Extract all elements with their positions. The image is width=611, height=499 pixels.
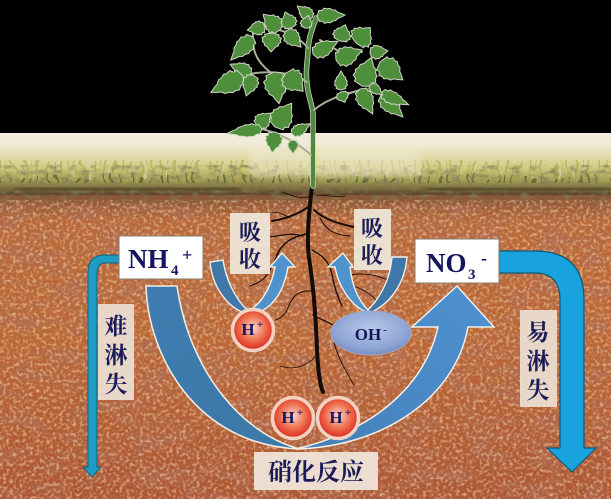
- arrow: nitrification curve to NO3-: [296, 286, 494, 449]
- OH- ion: -: [383, 324, 387, 336]
- H+ ion, centre left: +: [297, 407, 303, 419]
- label: absorb, left: [230, 213, 270, 274]
- H+ ion, centre right: H: [329, 408, 343, 427]
- label: hard to leach: 难: [104, 314, 128, 339]
- label: easy to leach: 淋: [526, 349, 550, 374]
- soil and grass background: [0, 133, 611, 499]
- arrow: H+ uptake, left: [210, 253, 295, 313]
- label: hard to leach: [98, 304, 134, 400]
- NO3- label box: NO: [426, 248, 466, 278]
- label: absorb, right: 吸: [361, 216, 383, 241]
- H+ ion, centre left: H: [281, 408, 295, 427]
- H+ ion, left: H: [241, 320, 255, 339]
- H+ ion, left: +: [257, 319, 263, 331]
- label: absorb, right: 收: [361, 243, 383, 268]
- OH- ion: [331, 311, 411, 355]
- label: easy to leach: 易: [526, 320, 550, 345]
- plant roots: [250, 186, 392, 392]
- NO3- label box: 3: [468, 267, 476, 283]
- NH4+ label box: NH: [128, 244, 168, 274]
- label: absorb, right: [354, 209, 391, 270]
- label: nitrification reaction: [254, 452, 378, 490]
- H+ ion, left: [232, 310, 274, 350]
- black sky background: [0, 0, 611, 133]
- OH- ion: OH: [355, 325, 381, 344]
- NO3- label box: -: [481, 248, 487, 268]
- H+ ion, centre left: [272, 398, 314, 438]
- label: absorb, left: 收: [239, 247, 261, 272]
- H+ ion, centre right: [318, 398, 358, 438]
- arrow: NH4+ slow leaching: [83, 255, 119, 477]
- label: easy to leach: [520, 310, 557, 407]
- NO3- label box: [415, 239, 499, 283]
- label: absorb, left: 吸: [239, 220, 261, 245]
- label: nitrification reaction: 硝化反应: [268, 459, 364, 486]
- NH4+ label box: +: [182, 245, 192, 265]
- arrow: NO3- fast leaching: [499, 251, 596, 472]
- arrow: nitrification curve from NH4+: [146, 286, 300, 449]
- label: easy to leach: 失: [526, 378, 550, 403]
- stem and branches: [250, 18, 395, 186]
- arrow: OH- uptake, right: [328, 253, 407, 312]
- label: hard to leach: 淋: [104, 343, 128, 368]
- label: hard to leach: 失: [104, 372, 128, 397]
- leaves: [206, 1, 411, 154]
- NH4+ label box: 4: [171, 263, 179, 279]
- H+ ion, centre right: +: [345, 407, 351, 419]
- plant: [206, 1, 411, 186]
- NH4+ label box: [119, 236, 203, 279]
